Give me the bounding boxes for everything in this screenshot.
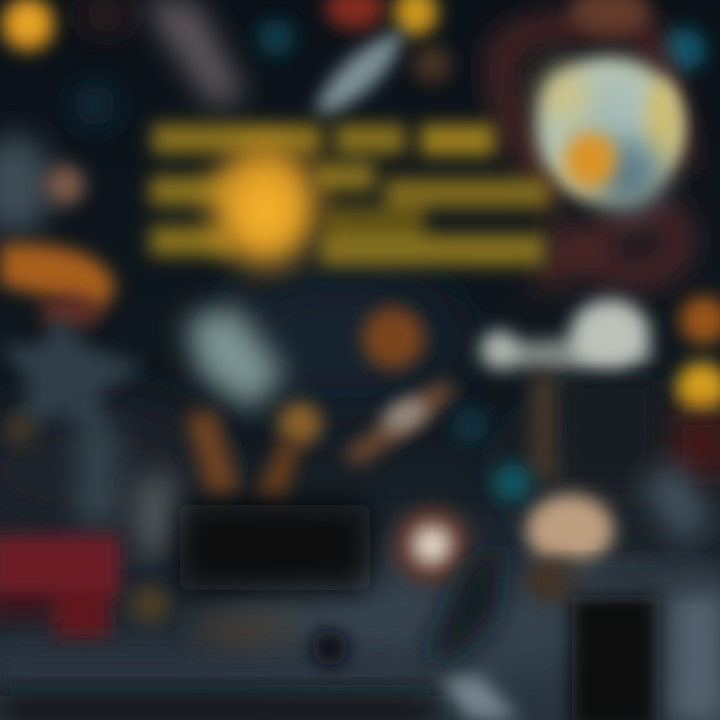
slate star bbox=[0, 315, 145, 440]
icon: sun behind title bbox=[211, 143, 319, 267]
black column bbox=[572, 595, 660, 720]
black keyboard bbox=[180, 505, 370, 590]
brown dot left bbox=[4, 414, 36, 446]
yellow lamp bbox=[676, 362, 720, 414]
tan smudge bbox=[190, 616, 300, 644]
grey column left bbox=[78, 420, 118, 530]
title: illegible yellow text bars bbox=[150, 124, 550, 266]
icon: grey feather bbox=[315, 30, 405, 115]
icon: orange orb top left bbox=[1, 0, 55, 51]
orbit rings bbox=[501, 23, 680, 285]
globe right highlight bbox=[646, 80, 678, 160]
slate shape right bbox=[640, 465, 712, 545]
cream orb bbox=[526, 494, 614, 566]
black bottom strip bbox=[0, 695, 440, 720]
pale green shape bbox=[185, 305, 285, 410]
red box bbox=[0, 535, 120, 640]
brown under cream orb bbox=[527, 558, 583, 602]
peach dot left bbox=[45, 165, 85, 205]
brown top of orbit bbox=[570, 0, 650, 36]
white highlight on streak bbox=[377, 391, 433, 439]
lamp orb bbox=[394, 507, 470, 583]
orange band bbox=[0, 244, 115, 310]
grey shape left bbox=[0, 135, 53, 235]
icon: blue smudge left bbox=[73, 83, 117, 127]
globe dark patch bbox=[594, 139, 662, 211]
icon: teal dot top right bbox=[661, 28, 705, 72]
black dot bbox=[312, 630, 348, 666]
amber smudge bbox=[132, 587, 168, 623]
dark red base bbox=[672, 415, 720, 475]
icon: brown dot bbox=[412, 44, 452, 84]
pale column bbox=[135, 475, 177, 555]
icon: red orb top bbox=[325, 0, 385, 30]
slate top bar bbox=[560, 565, 720, 589]
dark strand bbox=[430, 540, 505, 670]
pale wedge bottom bbox=[440, 675, 520, 720]
globe yellow highlight bbox=[541, 67, 589, 123]
bottom objects bbox=[0, 494, 720, 720]
slate panel bottom right bbox=[668, 585, 720, 720]
left side objects bbox=[0, 135, 177, 555]
globe with orbit rings bbox=[501, 0, 684, 285]
top decorative objects bbox=[1, 0, 705, 127]
globe orange spot bbox=[564, 132, 616, 188]
amber dot bbox=[278, 402, 322, 446]
right side objects bbox=[480, 296, 720, 545]
brown strand left bbox=[185, 410, 240, 500]
teal dot lower bbox=[493, 464, 531, 502]
brown post bbox=[530, 375, 560, 480]
slate desk strip bbox=[0, 650, 420, 690]
orange circle bbox=[362, 307, 424, 369]
icon: yellow orb top bbox=[394, 0, 438, 36]
white cloud bbox=[480, 299, 655, 371]
globe body bbox=[536, 56, 684, 204]
center objects bbox=[185, 305, 488, 500]
peach streak bbox=[340, 380, 458, 465]
dark panel bbox=[565, 380, 655, 480]
icon: brown smudge top bbox=[75, 0, 135, 33]
red-brown under band bbox=[40, 294, 100, 330]
icon: teal dot top bbox=[257, 19, 295, 57]
icon: pink-grey streak bbox=[140, 0, 245, 110]
brown strand right bbox=[255, 435, 300, 500]
orange lamp bbox=[680, 296, 720, 344]
teal dot center bbox=[452, 407, 488, 443]
